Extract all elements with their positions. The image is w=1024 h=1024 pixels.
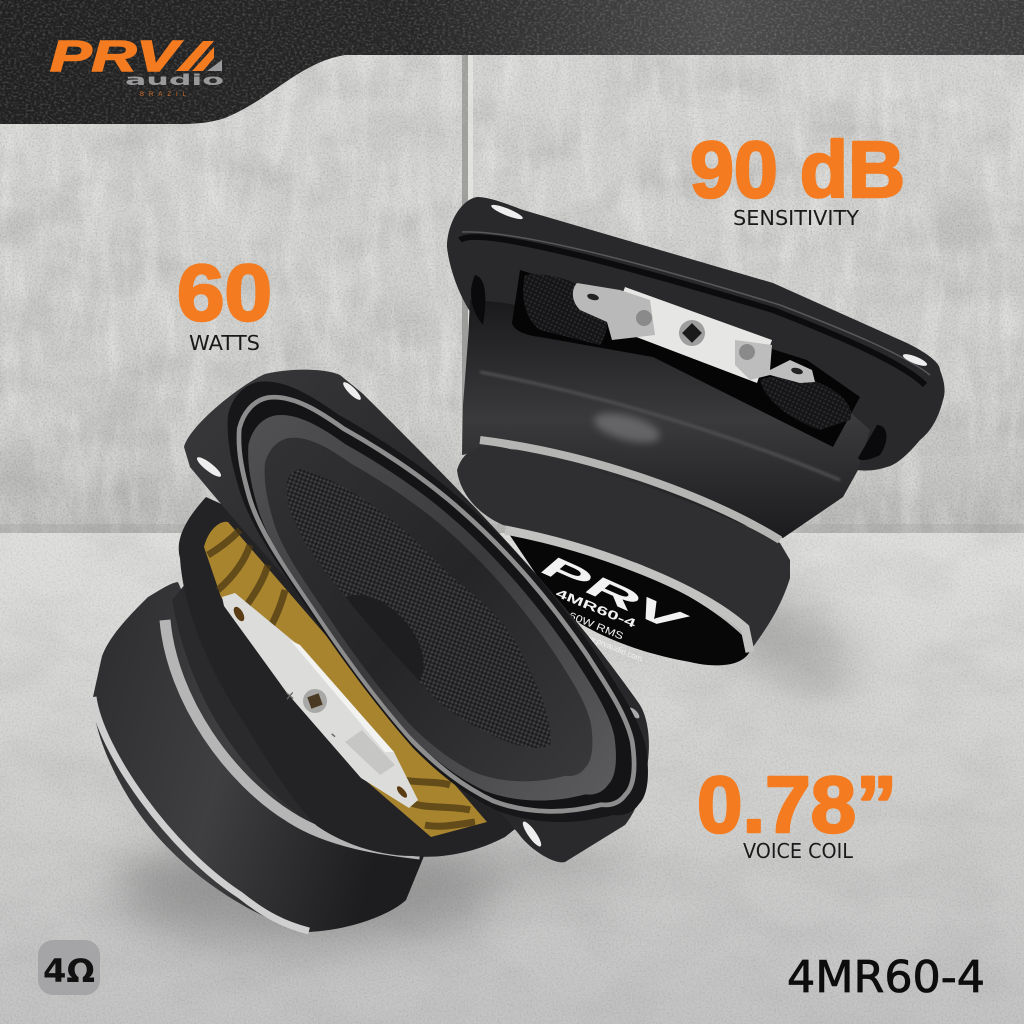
stat: 0.78 voice coil <box>697 760 897 863</box>
floor shadows under speakers <box>110 574 867 945</box>
rear speaker basket <box>462 300 870 538</box>
background: concrete wall <box>0 0 1024 535</box>
front driver gasket ring <box>228 381 648 822</box>
logo word Brazil: BRAZIL <box>140 92 191 98</box>
gray stripe <box>239 397 634 811</box>
front magnet neck <box>172 560 470 853</box>
front terminal strip: + <box>279 685 300 707</box>
cap printed text <box>537 548 694 663</box>
label voice coil: VOICE COIL <box>743 839 854 863</box>
logo: PRV audio Brazil <box>50 32 224 98</box>
front magnet <box>93 582 424 932</box>
background: concrete floor <box>0 533 1024 1024</box>
front terminal strip <box>222 593 418 808</box>
cone groove <box>265 438 592 781</box>
frame mounting holes <box>195 380 641 849</box>
logo A stripes <box>176 41 214 71</box>
badge: impedance 4 ohm <box>38 940 100 995</box>
cap printed text: 4MR60-4 <box>554 586 638 631</box>
speaker: front view <box>93 370 649 932</box>
value 90 dB: 90 dB <box>690 125 905 214</box>
value 0.78: 0.78” <box>697 760 897 849</box>
stat: 60 watts <box>177 248 272 355</box>
label sensitivity: SENSITIVITY <box>733 206 860 230</box>
rear side holes <box>471 275 886 460</box>
rear terminal strip <box>573 283 815 383</box>
front gold spider <box>204 522 487 837</box>
value 60: 60 <box>177 248 272 337</box>
rear speaker magnet cap <box>505 528 752 665</box>
top dark textured band <box>0 0 1024 124</box>
stat: 90 dB sensitivity <box>690 125 905 230</box>
front basket <box>179 497 520 857</box>
mesh cone <box>286 469 551 748</box>
model number: 4MR60-4 <box>787 952 985 1003</box>
front silver plate <box>165 620 420 854</box>
rear speaker magnet ring and body <box>457 445 790 647</box>
label watts: WATTS <box>189 331 260 355</box>
rear speaker window with cone mesh <box>512 270 860 447</box>
dust cap <box>346 595 424 680</box>
front frame plate <box>184 370 649 862</box>
cap printed text: PRV <box>537 548 694 642</box>
frame ear holes <box>490 202 928 368</box>
front magnet silver rim <box>93 697 309 931</box>
cap printed text: 60W RMS <box>567 611 625 643</box>
badge: impedance 4 ohm: 4Ω <box>43 952 95 990</box>
rubber surround <box>248 415 616 801</box>
rear speaker frame <box>447 197 945 471</box>
front terminal strip: - <box>325 725 343 744</box>
speaker: rear view (back) <box>447 197 945 665</box>
cap printed text: www.prvaudio.com <box>576 629 644 663</box>
logo word PRV: PRV <box>50 32 183 81</box>
logo word audio: audio <box>125 71 224 89</box>
